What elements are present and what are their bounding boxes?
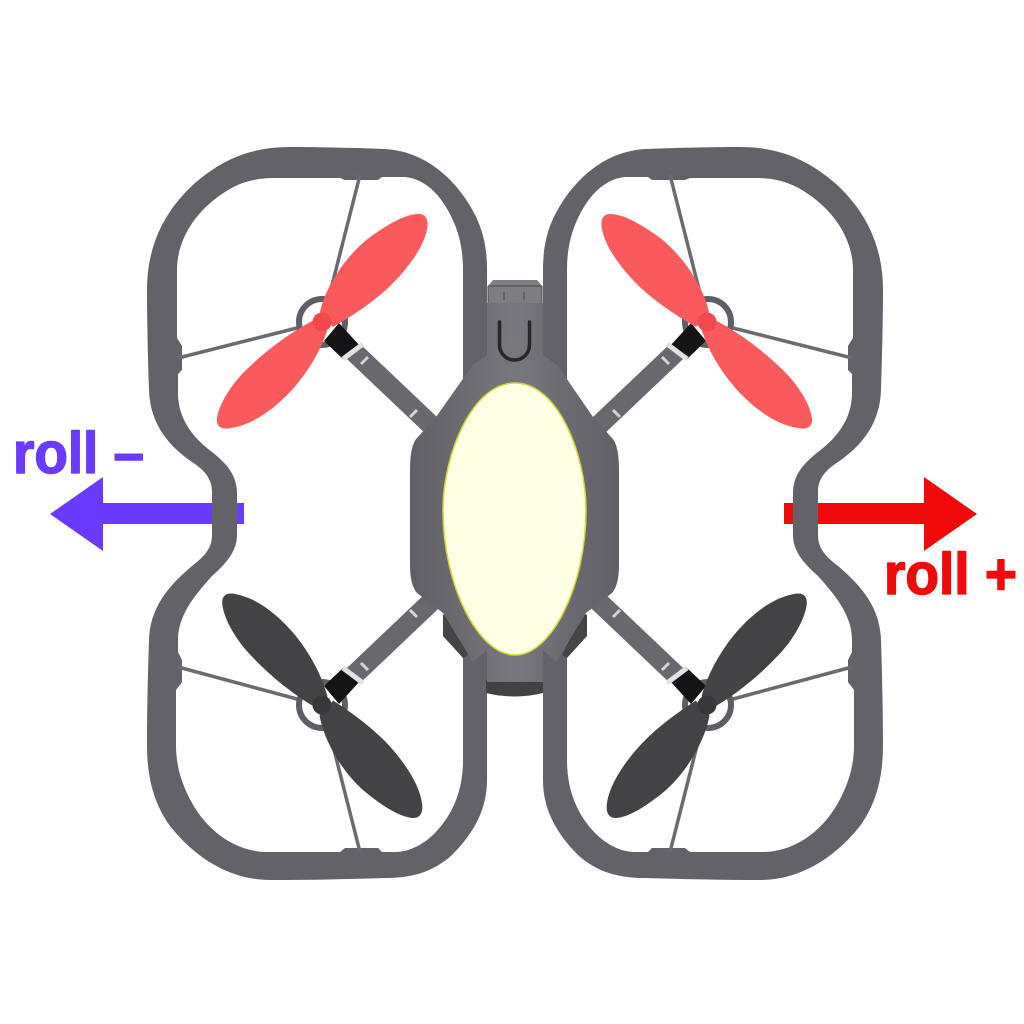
propeller: top left, red	[217, 214, 428, 429]
right propeller guard	[543, 147, 883, 880]
power button	[504, 334, 526, 356]
battery latch	[488, 280, 542, 304]
label: roll minus: roll –	[13, 421, 144, 486]
propeller: bottom right, black	[596, 593, 818, 818]
drone body	[410, 280, 619, 696]
yellow light panel	[443, 383, 586, 655]
arrow: roll plus	[784, 477, 977, 551]
propeller: bottom left, black	[211, 593, 433, 818]
body shell	[410, 303, 619, 682]
motor arm and struts: top right	[598, 175, 852, 426]
latch slots	[488, 286, 542, 303]
motor arm and struts: bottom left	[178, 601, 432, 852]
arrow: roll minus	[50, 477, 244, 551]
side battery pads	[443, 612, 587, 658]
power button cradle	[500, 322, 530, 360]
lower body tab	[486, 680, 543, 696]
propeller: top right, red	[601, 214, 812, 429]
label: roll plus: roll +	[884, 542, 1017, 607]
left propeller guard	[147, 147, 487, 880]
motor arm and struts: top left	[178, 175, 432, 426]
motor arm and struts: bottom right	[598, 601, 852, 852]
